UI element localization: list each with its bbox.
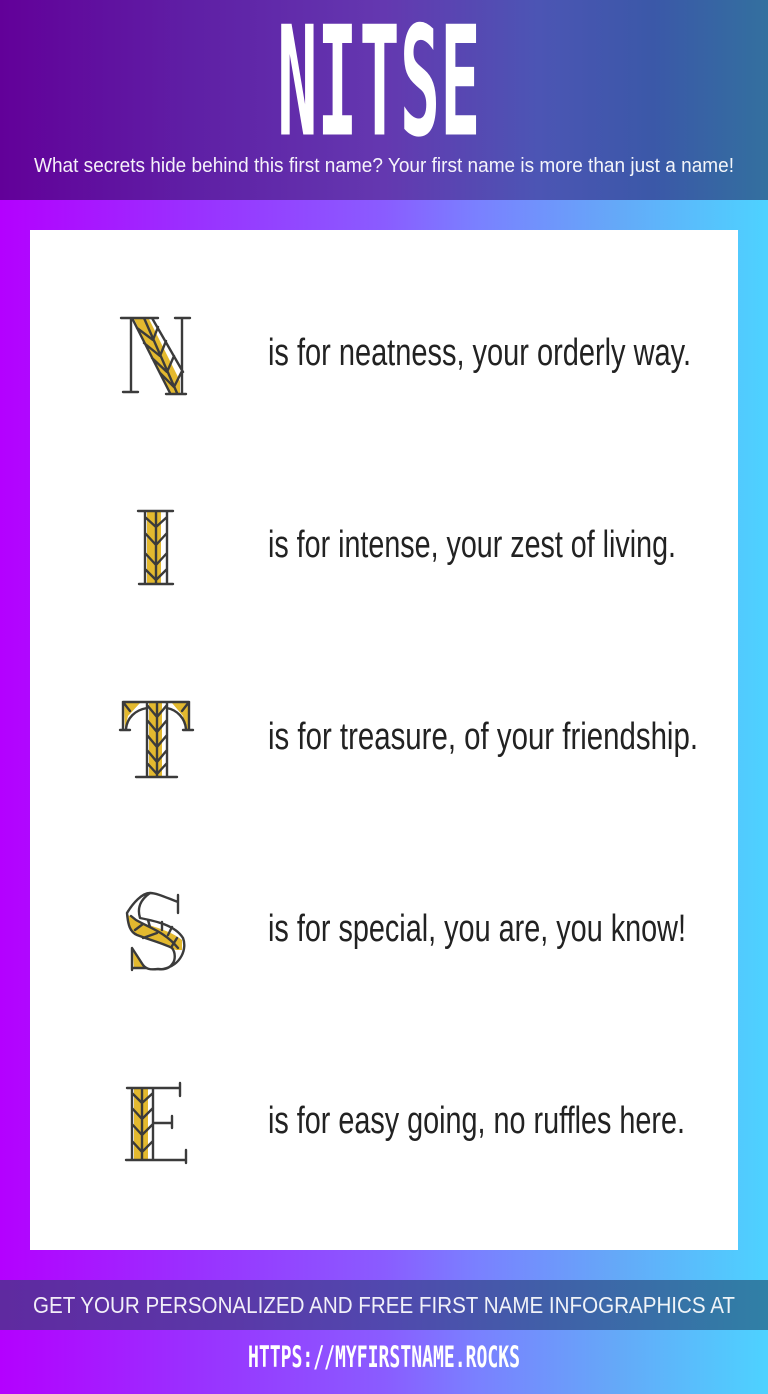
icon: letter S	[127, 893, 184, 970]
header band	[0, 0, 768, 200]
panel: white letters card	[30, 230, 738, 1250]
icon: letter I	[138, 511, 173, 584]
icon: letter E	[126, 1083, 186, 1163]
footer band	[0, 1280, 768, 1330]
icon: letter N	[121, 318, 190, 394]
footer url: HTTPS://MYFIRSTNAME.ROCKS	[248, 1340, 520, 1374]
icon: letter T	[120, 702, 193, 777]
subtitle: What secrets hide behind this first name? Your first name is more than just a name!	[34, 155, 734, 177]
title	[277, 0, 480, 171]
